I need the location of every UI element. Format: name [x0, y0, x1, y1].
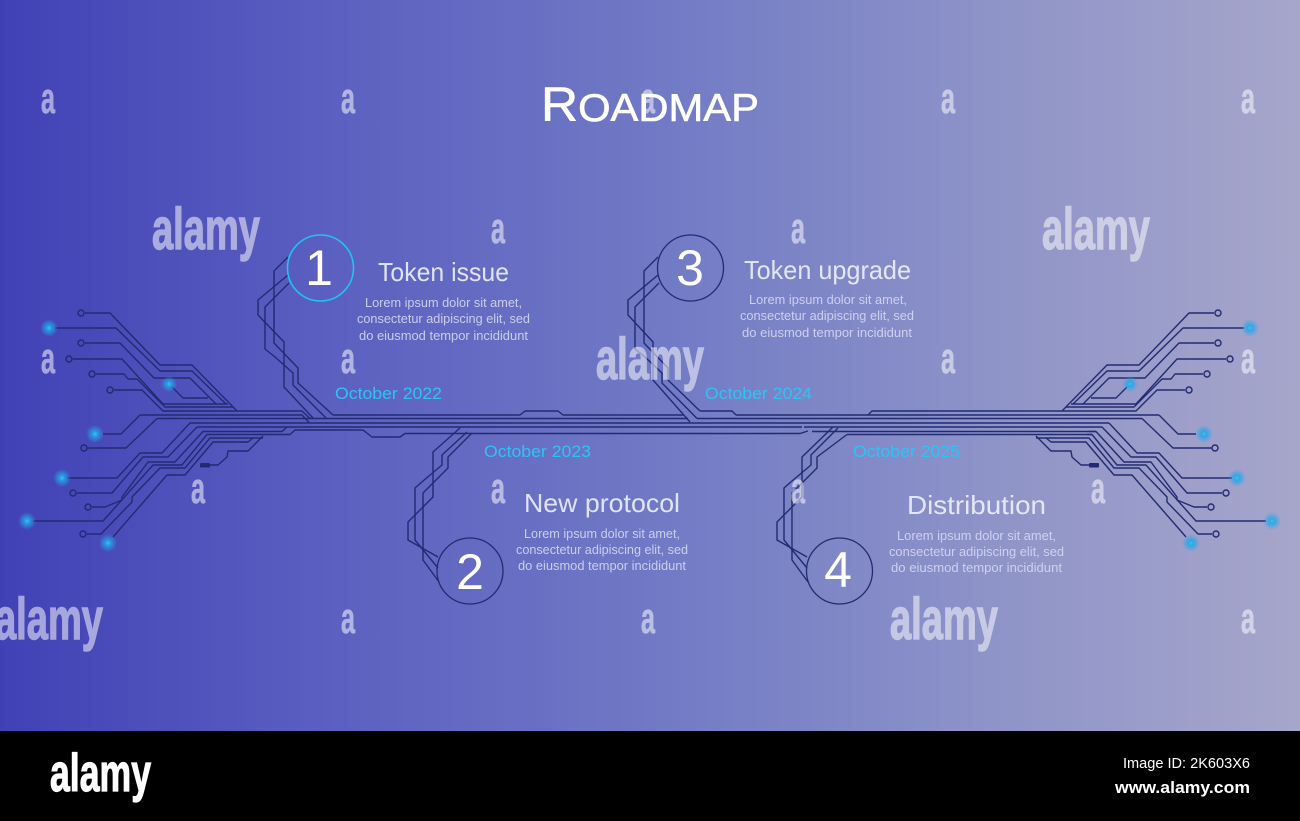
step 3: [628, 235, 914, 422]
step 2 number circle: [437, 538, 503, 604]
step 1: [258, 235, 530, 418]
right circuit branch: [1036, 310, 1281, 552]
image id: Image ID: 2K603X6: [1123, 755, 1250, 772]
step 1 description: [357, 295, 530, 343]
step 2 description: consectetur adipiscing elit, sed: [516, 542, 688, 557]
step 4 heading: Distribution: [907, 490, 1046, 520]
step 3 number circle: [658, 235, 724, 301]
watermarks: alamy: [152, 197, 260, 262]
watermarks: a: [491, 204, 505, 253]
step 4 number circle: 4: [824, 542, 852, 598]
website: www.alamy.com: [1114, 778, 1250, 797]
step 2 description: do eiusmod tempor incididunt: [518, 558, 686, 573]
watermarks: alamy: [596, 327, 704, 392]
watermarks: a: [641, 74, 655, 123]
step 4 description: [889, 528, 1064, 575]
step 4: [777, 427, 1064, 604]
step 2 heading: New protocol: [524, 488, 680, 518]
step 2 date: October 2023: [484, 442, 591, 461]
step 3 heading: Token upgrade: [744, 255, 911, 285]
watermarks: a: [791, 464, 805, 513]
step 4 number circle: [806, 538, 872, 604]
chip component: [200, 463, 210, 468]
watermarks: a: [1241, 334, 1255, 383]
step 4 description: do eiusmod tempor incididunt: [891, 560, 1062, 575]
central circuit bus: [140, 411, 1159, 437]
step 2 number circle: 2: [456, 544, 484, 600]
glowing nodes: [18, 319, 177, 552]
step 3 description: Lorem ipsum dolor sit amet,: [749, 292, 907, 307]
watermarks: a: [1241, 74, 1255, 123]
step 2: [408, 428, 688, 604]
watermarks: a: [941, 74, 955, 123]
watermarks: a: [191, 464, 205, 513]
watermarks: a: [491, 464, 505, 513]
step 3 description: [740, 292, 914, 340]
watermarks: a: [941, 334, 955, 383]
step 3 date: October 2024: [705, 384, 812, 403]
watermarks: a: [341, 334, 355, 383]
step 1 number circle: 1: [305, 240, 333, 296]
watermarks: a: [1241, 594, 1255, 643]
step 3 description: do eiusmod tempor incididunt: [742, 325, 912, 340]
connector pads: [66, 310, 113, 537]
step 4 description: Lorem ipsum dolor sit amet,: [897, 528, 1056, 543]
lower left traces: [33, 423, 263, 537]
step 1 traces: [258, 257, 333, 418]
watermarks: a: [341, 74, 355, 123]
footer logo: alamy: [50, 744, 151, 803]
watermarks: a: [41, 74, 55, 123]
watermarks: alamy: [1042, 197, 1150, 262]
watermarks: a: [1091, 464, 1105, 513]
watermarks: a: [341, 594, 355, 643]
step 2 description: [516, 526, 688, 573]
step 1 description: do eiusmod tempor incididunt: [359, 328, 528, 343]
left circuit branch: [18, 310, 263, 552]
step 2 traces: [408, 428, 472, 582]
step 1 description: consectetur adipiscing elit, sed: [357, 311, 530, 326]
step 1 description: Lorem ipsum dolor sit amet,: [365, 295, 522, 310]
step 2 description: Lorem ipsum dolor sit amet,: [524, 526, 680, 541]
step 3 number circle: 3: [676, 240, 704, 296]
watermarks: a: [641, 594, 655, 643]
title: ROADMAP: [541, 79, 759, 132]
watermarks: [0, 74, 1255, 652]
watermarks: a: [41, 334, 55, 383]
upper left traces: [55, 313, 237, 448]
step 4 date: October 2025: [853, 442, 960, 461]
footer bar: [0, 731, 1300, 821]
step 4 traces: [777, 427, 847, 582]
step 1 date: October 2022: [335, 384, 442, 403]
watermarks: a: [791, 204, 805, 253]
step 3 traces: [628, 257, 700, 422]
step 1 number circle: [288, 235, 354, 301]
watermarks: alamy: [890, 587, 998, 652]
step 4 description: consectetur adipiscing elit, sed: [889, 544, 1064, 559]
step 3 description: consectetur adipiscing elit, sed: [740, 308, 914, 323]
step 1 heading: Token issue: [378, 257, 509, 287]
